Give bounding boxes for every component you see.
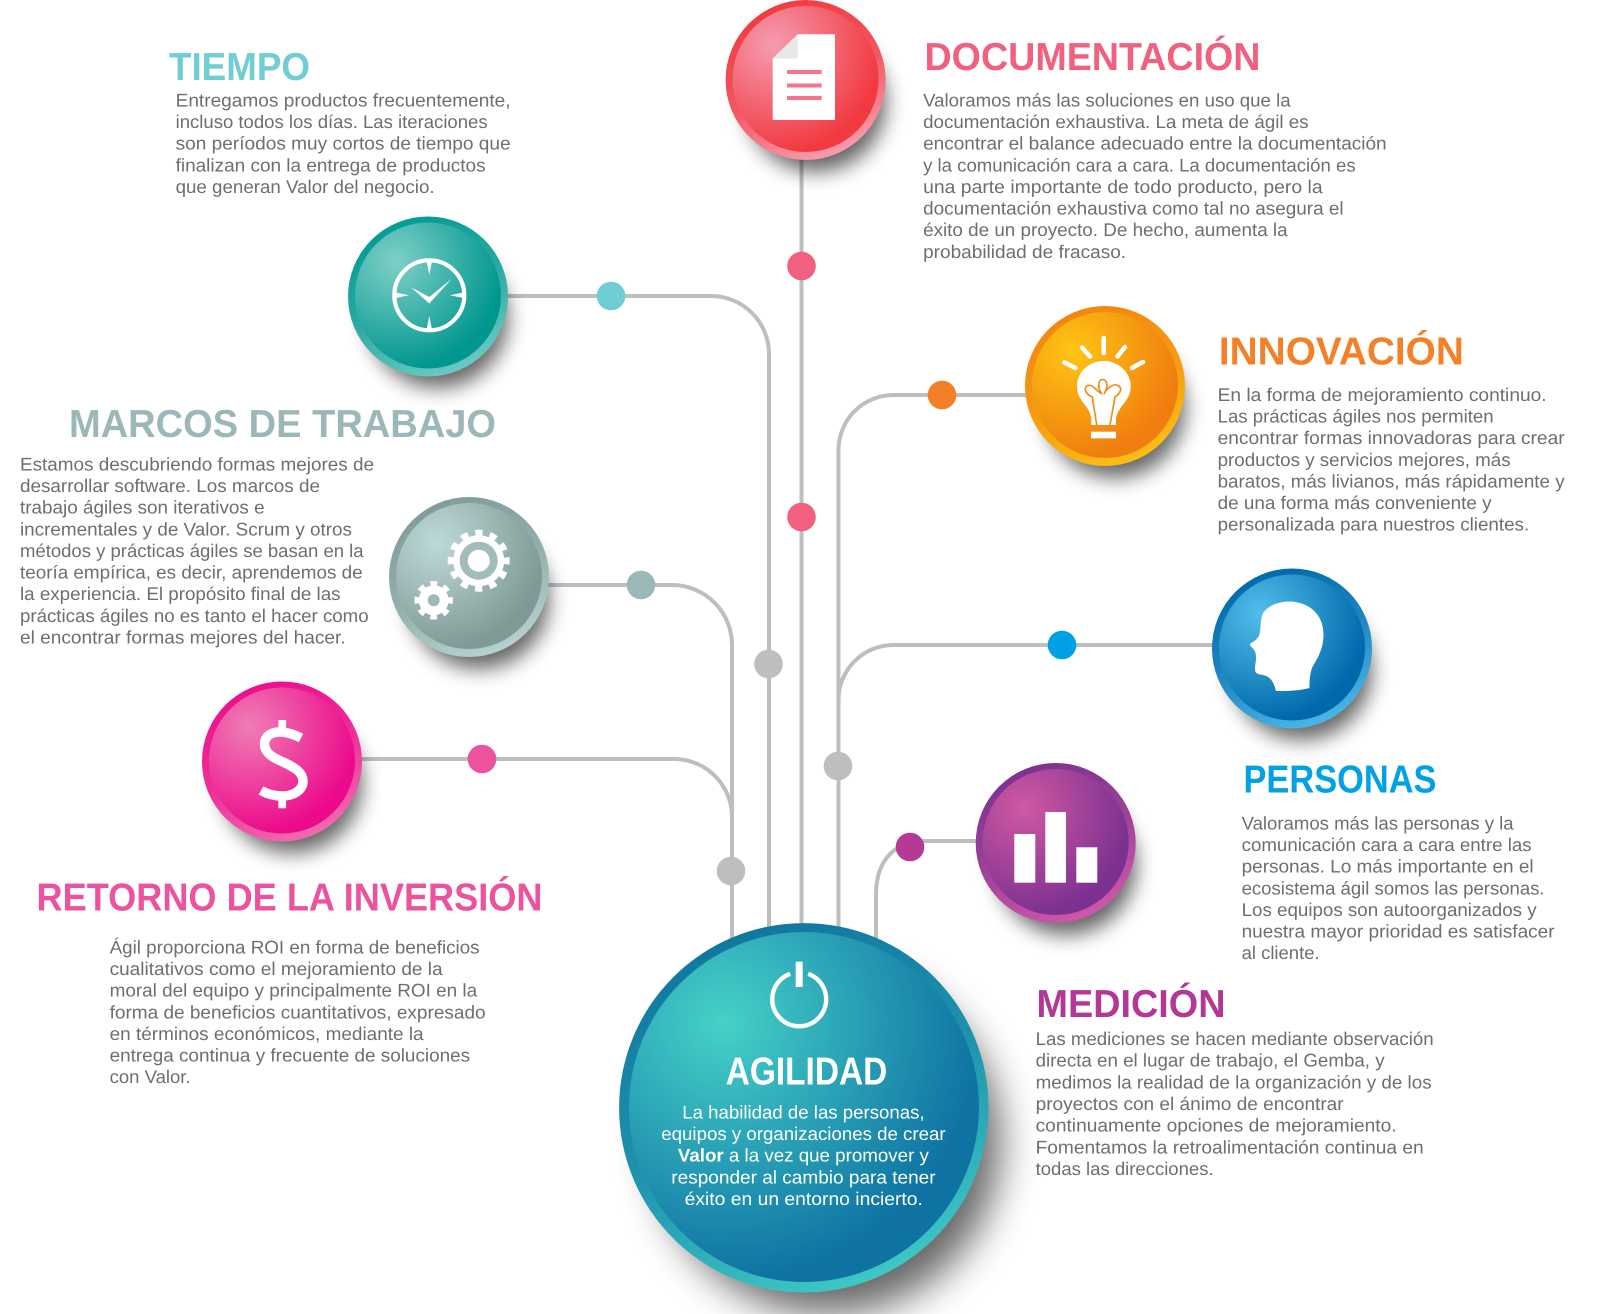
text: innovación	[1218, 384, 1565, 535]
text: tiempo: son períodos muy cortos de tiempo que	[176, 133, 511, 154]
icon: power	[772, 962, 826, 1026]
heading: retorno de la inversión: RETORNO DE LA INVERSIÓN	[36, 876, 542, 920]
text: innovación: baratos, más livianos, más rápidamente y	[1218, 470, 1565, 491]
text: medición: medimos la realidad de la organización y de los	[1036, 1071, 1432, 1092]
text: retorno de la inversión: cualitativos como el mejoramiento de la	[110, 958, 443, 979]
text: personas	[1242, 812, 1555, 963]
text: retorno de la inversión: moral del equipo y principalmente ROI en la	[110, 980, 478, 1001]
text: documentación: probabilidad de fracaso.	[923, 241, 1126, 262]
panel: retorno de la inversión	[36, 876, 542, 1087]
text: innovación: personalizada para nuestros clientes.	[1218, 514, 1529, 535]
heading: marcos de trabajo: MARCOS DE TRABAJO	[69, 403, 496, 446]
text: personas: ecosistema ágil somos las personas.	[1242, 877, 1545, 898]
text: personas: Valoramos más las personas y la	[1242, 812, 1514, 833]
text: innovación: En la forma de mejoramiento continuo.	[1218, 384, 1547, 405]
text: medición: todas las direcciones.	[1036, 1158, 1214, 1179]
text: tiempo	[176, 89, 511, 197]
panel: agilidad	[619, 923, 1000, 1314]
icon: gears node	[389, 497, 549, 669]
text: marcos de trabajo: la experiencia. El propósito final de las	[20, 583, 341, 604]
text: medición: Las mediciones se hacen mediante observación	[1036, 1028, 1434, 1049]
text: documentación: Valoramos más las soluciones en uso que la	[923, 89, 1291, 110]
text: documentación: éxito de un proyecto. De hecho, aumenta la	[923, 219, 1288, 240]
panel: medición	[1036, 982, 1434, 1179]
text: medición	[1036, 1028, 1434, 1179]
text: personas: al cliente.	[1242, 942, 1320, 963]
text: retorno de la inversión: en términos económicos, mediante la	[110, 1023, 424, 1044]
text: documentación: encontrar el balance adecuado entre la documentación	[923, 133, 1387, 154]
text: tiempo: Entregamos productos frecuentemente,	[176, 89, 511, 110]
connector lines	[358, 155, 1215, 940]
connector dots	[468, 252, 1076, 885]
text: medición: directa en el lugar de trabajo, el Gemba, y	[1036, 1050, 1385, 1071]
panel: marcos de trabajo	[20, 403, 496, 648]
text: retorno de la inversión	[110, 936, 486, 1087]
text: marcos de trabajo: trabajo ágiles son iterativos e	[20, 497, 265, 518]
text: retorno de la inversión: Ágil proporciona ROI en forma de beneficios	[110, 936, 480, 957]
heading: innovación: INNOVACIÓN	[1219, 330, 1464, 374]
icon: head node	[1212, 568, 1372, 740]
text: marcos de trabajo: prácticas ágiles no es tanto el hacer como	[20, 605, 369, 626]
text: personas: personas. Lo más importante en el	[1242, 856, 1534, 877]
text: tiempo: incluso todos los días. Las iteraciones	[176, 111, 488, 132]
text: documentación: documentación exhaustiva como tal no asegura el	[923, 198, 1344, 219]
panel: innovación	[1218, 330, 1565, 535]
icon: clock node	[348, 216, 508, 388]
icon: bar chart node	[976, 763, 1136, 935]
text: agilidad description: Valor a la vez que promover y	[678, 1145, 930, 1166]
text: agilidad description	[661, 1101, 946, 1209]
heading: personas: PERSONAS	[1244, 759, 1436, 802]
text: agilidad description: La habilidad de las personas,	[682, 1101, 925, 1122]
text: marcos de trabajo	[20, 453, 374, 648]
text: personas: nuestra mayor prioridad es satisfacer	[1242, 921, 1555, 942]
text: agilidad description: éxito en un entorno incierto.	[685, 1188, 923, 1209]
text: marcos de trabajo: Estamos descubriendo formas mejores de	[20, 453, 374, 474]
text: documentación	[923, 89, 1387, 262]
text: marcos de trabajo: teoría empírica, es decir, aprendemos de	[20, 562, 363, 583]
text: medición: continuamente opciones de mejoramiento.	[1036, 1115, 1397, 1136]
text: innovación: encontrar formas innovadoras para crear	[1218, 427, 1565, 448]
text: innovación: de una forma más conveniente y	[1218, 492, 1492, 513]
icon: documentation node	[726, 0, 886, 172]
text: documentación: y la comunicación cara a cara. La documentación es	[923, 154, 1356, 175]
text: documentación: una parte importante de todo producto, pero la	[923, 176, 1323, 197]
panel: tiempo	[169, 46, 511, 197]
text: retorno de la inversión: entrega continua y frecuente de soluciones	[110, 1045, 470, 1066]
icon: dollar node	[202, 682, 362, 853]
text: agilidad description: equipos y organizaciones de crear	[661, 1123, 946, 1144]
heading: medición: MEDICIÓN	[1036, 982, 1226, 1026]
text: retorno de la inversión: con Valor.	[110, 1066, 191, 1087]
text: documentación: documentación exhaustiva. La meta de ágil es	[923, 111, 1309, 132]
text: personas: Los equipos son autoorganizados y	[1242, 899, 1537, 920]
text: marcos de trabajo: métodos y prácticas ágiles se basan en la	[20, 540, 364, 561]
text: marcos de trabajo: incrementales y de Valor. Scrum y otros	[20, 518, 352, 539]
text: innovación: Las prácticas ágiles nos permiten	[1218, 406, 1494, 427]
panel: personas	[1242, 759, 1555, 963]
heading: agilidad: AGILIDAD	[726, 1050, 887, 1093]
text: tiempo: finalizan con la entrega de productos	[176, 154, 486, 175]
text: medición: proyectos con el ánimo de encontrar	[1036, 1093, 1344, 1114]
text: retorno de la inversión: forma de beneficios cuantitativos, expresado	[110, 1001, 486, 1022]
heading: tiempo: TIEMPO	[169, 46, 310, 89]
text: innovación: productos y servicios mejores, más	[1218, 449, 1511, 470]
icon: light bulb node	[1025, 306, 1185, 478]
text: agilidad description: responder al cambio para tener	[671, 1166, 936, 1187]
text: tiempo: que generan Valor del negocio.	[176, 176, 435, 197]
panel: documentación	[923, 35, 1387, 262]
heading: documentación: DOCUMENTACIÓN	[924, 35, 1260, 79]
text: personas: comunicación cara a cara entre las	[1242, 834, 1532, 855]
text: medición: Fomentamos la retroalimentación continua en	[1036, 1136, 1424, 1157]
text: marcos de trabajo: desarrollar software. Los marcos de	[20, 475, 320, 496]
text: marcos de trabajo: el encontrar formas mejores del hacer.	[20, 627, 346, 648]
